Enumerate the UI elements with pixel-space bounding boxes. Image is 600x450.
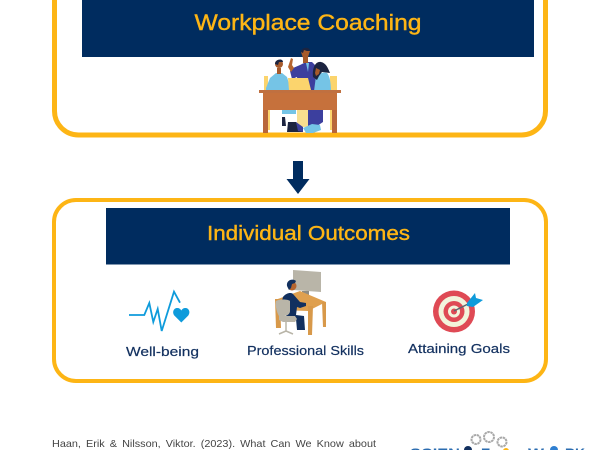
logo: science for work xyxy=(410,432,585,450)
icon: gears xyxy=(472,432,506,446)
label: well-being: Well-being xyxy=(126,344,199,359)
outcome: well-being xyxy=(126,292,199,359)
icon: target with arrow xyxy=(433,290,483,332)
label: attaining goals: Attaining Goals xyxy=(408,341,511,356)
heading banner: workplace coaching: Workplace Coaching xyxy=(194,10,422,35)
logo text xyxy=(410,445,585,450)
heading banner: individual outcomes: Individual Outcomes xyxy=(207,223,410,245)
citation text: Haan, Erik & Nilsson, Viktor. (2023). What Can We Know about xyxy=(52,438,376,450)
panel: workplace coaching xyxy=(54,0,546,135)
label: professional skills: Professional Skills xyxy=(247,343,365,358)
heading banner: individual outcomes xyxy=(106,208,510,264)
outcome: professional skills xyxy=(247,270,365,358)
icon: heartbeat line and heart xyxy=(129,292,189,331)
heading banner: workplace coaching xyxy=(82,0,534,57)
illustration: team at a desk xyxy=(259,48,341,133)
icon: star gears xyxy=(464,446,558,450)
panel: individual outcomes xyxy=(54,200,546,381)
icon: person working at desk xyxy=(275,270,326,335)
outcome: attaining goals xyxy=(408,290,511,356)
arrow: coaching leads to outcomes xyxy=(286,161,310,194)
